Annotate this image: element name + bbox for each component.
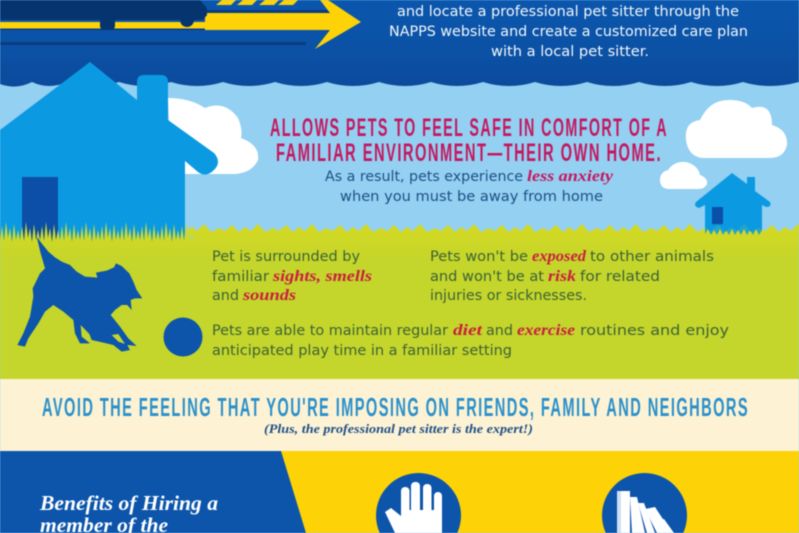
icon: right small cloud: [660, 162, 707, 189]
text block: diet and exercise routines: anticipated play time in a familiar setting: [212, 343, 512, 359]
icon: white cloud behind house: [168, 98, 258, 174]
text block: less anxiety: [325, 168, 614, 205]
text block: not exposed to other animals: Pets won't be: [430, 249, 528, 265]
house door: [22, 177, 58, 243]
text block: diet and exercise routines: diet: [453, 322, 483, 339]
icon: car silhouette: [0, 0, 207, 30]
text block: not exposed to other animals: and won't be at: [430, 269, 545, 285]
text block: locate a pet sitter: and locate a professional pet sitter through the: [397, 4, 739, 20]
text block: less anxiety: less anxiety: [527, 168, 614, 185]
text block: familiar sights, smells, sounds: and: [212, 288, 239, 304]
icon: right large cloud: [686, 100, 787, 158]
text block: not exposed to other animals: for related: [580, 269, 660, 285]
icon: hand in circle: [376, 473, 461, 533]
icon: ball: [164, 318, 202, 356]
text block: locate a pet sitter: [389, 4, 748, 60]
text block: less anxiety: As a result, pets experience: [325, 169, 523, 185]
panel: blue benefits tab: [0, 451, 306, 533]
icon: small blue house: [695, 173, 770, 232]
icon: books in circle: [602, 473, 687, 533]
small house door: [712, 207, 723, 225]
panel: sky background: [0, 80, 799, 240]
text block: familiar sights, smells, sounds: sights, smells: [272, 268, 372, 285]
text block: diet and exercise routines: and: [486, 323, 513, 339]
text block: diet and exercise routines: [212, 322, 729, 359]
icon: large blue house: [0, 62, 218, 245]
arrow with car: [0, 0, 361, 49]
text block: familiar sights, smells, sounds: familiar: [212, 269, 269, 285]
text block: less anxiety: when you must be away from home: [340, 189, 603, 205]
panel: cream banner: [0, 379, 799, 451]
text block: not exposed to other animals: to other animals: [590, 249, 714, 265]
text block: not exposed to other animals: injuries or sicknesses.: [430, 288, 587, 304]
text block: familiar sights, smells, sounds: [212, 249, 372, 304]
icon: dog silhouette: [17, 237, 142, 352]
text block: locate a pet sitter: NAPPS website and create a customized care plan: [389, 24, 748, 40]
text block: not exposed to other animals: risk: [548, 268, 576, 285]
panel: top blue band with scalloped edge: [0, 0, 799, 87]
text block: familiar sights, smells, sounds: Pet is surrounded by: [212, 249, 360, 265]
text block: diet and exercise routines: exercise: [517, 322, 575, 339]
text block: not exposed to other animals: [430, 248, 714, 304]
panel: yellow benefits background: [0, 451, 799, 533]
panel: grass field: [0, 222, 799, 379]
text block: locate a pet sitter: with a local pet sitter.: [491, 44, 649, 60]
heading: benefits of hiring: Benefits of Hiring a: [39, 491, 218, 515]
heading: allows pets to feel safe: [270, 114, 668, 167]
text block: diet and exercise routines: routines and enjoy: [580, 323, 729, 339]
text block: diet and exercise routines: Pets are able to maintain regular: [212, 323, 448, 339]
text block: not exposed to other animals: exposed: [532, 248, 587, 265]
subheading: the pet sitter is the expert: (Plus, the professional pet sitter is the expert!): [264, 421, 533, 436]
text block: familiar sights, smells, sounds: sounds: [242, 287, 296, 304]
